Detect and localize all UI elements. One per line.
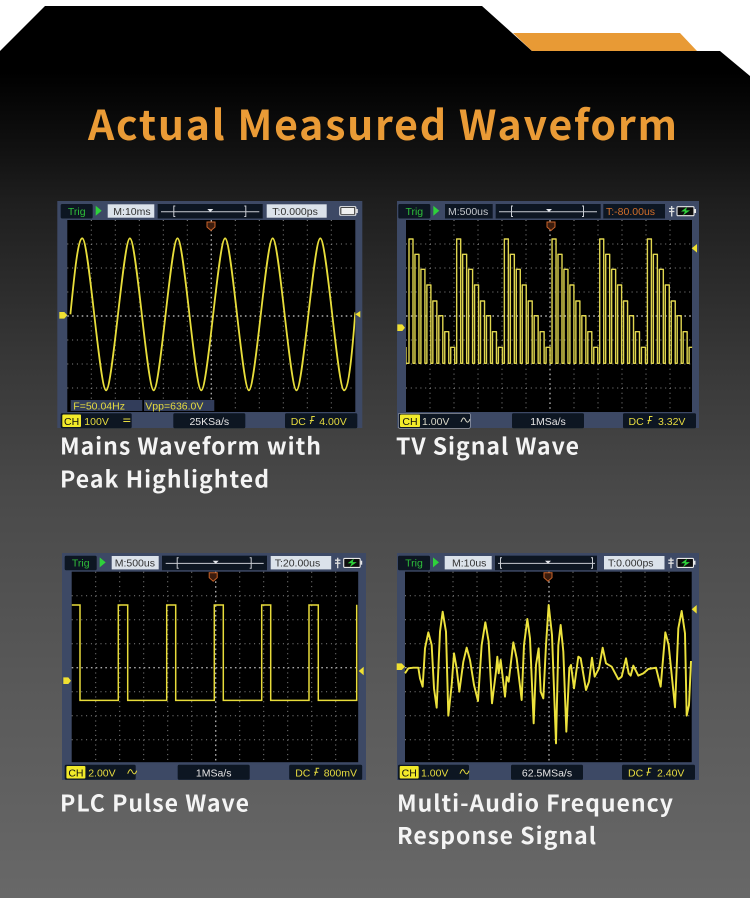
title: Actual Measured Waveform (87, 92, 677, 152)
oscilloscope panel: PLC pulse (62, 553, 366, 780)
bottom status bar (61, 413, 357, 428)
top status bar (61, 204, 358, 218)
bottom status bar: 1MSa/s (530, 416, 566, 428)
caption: multi-audio: Response Signal (397, 817, 596, 851)
caption: mains waveform: Peak Highlighted (60, 460, 269, 494)
top status bar: M:10ms (113, 206, 151, 218)
audio waveform trace (405, 605, 691, 743)
top status bar: T:-80.00us (606, 206, 655, 218)
bottom status bar: 4.00V (319, 416, 347, 428)
trigger level marker (692, 605, 697, 614)
oscilloscope panel: multi-audio frequency (397, 553, 699, 780)
top status bar: Trig (405, 206, 423, 218)
channel ground marker (397, 324, 405, 331)
bottom status bar: DC (295, 767, 311, 779)
bottom status bar: 800mV (324, 767, 357, 779)
top status bar (398, 556, 696, 570)
pulse waveform trace (72, 605, 357, 700)
top status bar: T:20.00us (275, 558, 320, 570)
bottom status bar: CH (68, 767, 83, 779)
bottom status bar: CH (402, 416, 418, 428)
staircase bar waveform trace (406, 239, 692, 363)
trigger position marker (209, 573, 217, 581)
caption: TV signal: TV Signal Wave (396, 428, 579, 462)
frequency and Vpp readouts: F=50.04Hz (73, 400, 125, 412)
top status bar: M:500us (448, 206, 488, 218)
bottom status bar: CH (402, 767, 417, 779)
bottom status bar: 3.32V (658, 416, 685, 428)
bottom status bar: 100V (84, 416, 109, 428)
sine waveform trace (70, 238, 355, 390)
caption: multi-audio: Multi-Audio Frequency (397, 784, 673, 818)
bottom status bar: 1.00V (421, 767, 448, 779)
trigger position marker (207, 222, 215, 230)
oscilloscope panel: TV signal (397, 201, 699, 428)
caption: PLC pulse: PLC Pulse Wave (60, 784, 249, 818)
bottom status bar: DC (291, 416, 306, 428)
channel ground marker (63, 677, 71, 684)
top status bar: T:0.000ps (608, 558, 654, 570)
bottom status bar: 62.5MSa/s (522, 767, 572, 779)
top status bar: M:500us (115, 558, 155, 570)
frequency and Vpp readouts: Vpp=636.0V (145, 400, 203, 412)
trigger level marker (359, 667, 364, 675)
caption: mains waveform (60, 428, 321, 494)
channel ground marker (59, 312, 67, 319)
bottom status bar: 2.40V (657, 767, 684, 779)
top status bar: M:10us (452, 558, 486, 570)
trigger position marker (547, 222, 555, 230)
bottom status bar: 2.00V (88, 767, 116, 779)
top status bar: T:0.000ps (272, 206, 318, 218)
bottom status bar: 1MSa/s (196, 767, 232, 779)
bottom status bar: 25KSa/s (189, 416, 229, 428)
trigger level marker (692, 244, 697, 253)
caption: mains waveform: Mains Waveform with (60, 428, 321, 462)
oscilloscope panel: mains waveform (57, 201, 362, 428)
bottom status bar: DC (628, 767, 644, 779)
top status bar (398, 204, 696, 218)
bottom status bar (398, 765, 695, 780)
top status bar (65, 556, 362, 570)
top status bar: Trig (72, 558, 90, 570)
top status bar: Trig (68, 206, 86, 218)
bottom status bar (398, 413, 696, 428)
caption: multi-audio (397, 784, 673, 851)
top status bar: Trig (405, 558, 423, 570)
channel ground marker (397, 663, 405, 670)
trigger position marker (544, 573, 552, 581)
orange folder tab accent (513, 33, 697, 51)
bottom status bar: DC (628, 416, 644, 428)
bottom status bar (65, 765, 362, 780)
bottom status bar: CH (64, 416, 79, 428)
trigger level marker (355, 311, 360, 318)
frequency and Vpp readouts (71, 400, 214, 412)
bottom status bar: 1.00V (422, 416, 449, 428)
